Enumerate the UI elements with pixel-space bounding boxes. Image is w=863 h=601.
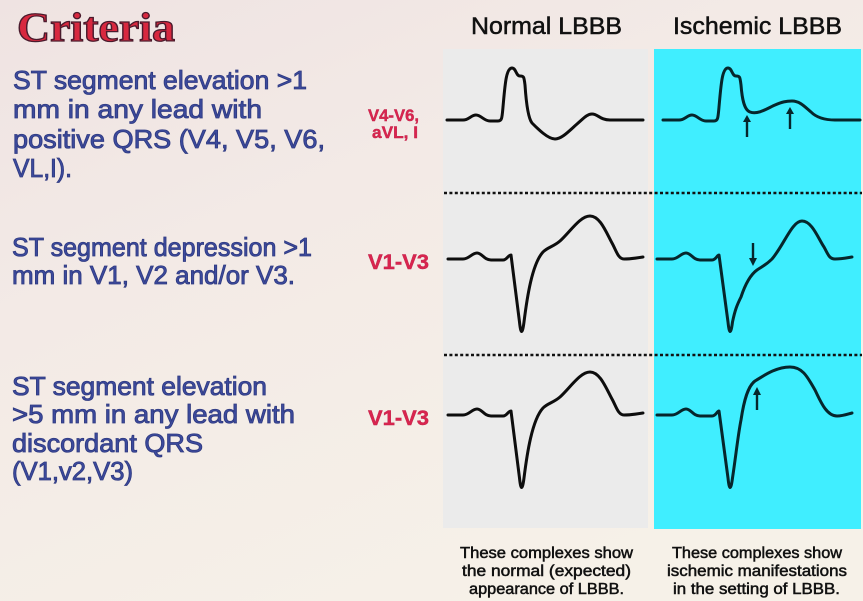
text block: criterion 2: ST segment depression >1 bbox=[12, 232, 312, 262]
ECG: ischemic V1-V3 row 2 bbox=[657, 221, 852, 332]
lead label: V1-V3 row 2: V1-V3 bbox=[368, 251, 429, 274]
panel: normal LBBB bbox=[443, 49, 648, 528]
text block: criterion 1: mm in any lead with bbox=[13, 94, 262, 124]
ECG: normal V1-V3 row 3 bbox=[448, 372, 643, 488]
lead label: V1-V3 row 3: V1-V3 bbox=[368, 407, 429, 430]
arrow: ST elevation discordant bbox=[753, 387, 761, 410]
caption: normal: These complexes show bbox=[460, 545, 634, 562]
ECG: ischemic V4-V6 bbox=[663, 68, 860, 121]
title: Criteria bbox=[17, 4, 175, 50]
text block: criterion 3: (V1,v2,V3) bbox=[12, 456, 133, 486]
text block: criterion 3 bbox=[12, 371, 295, 486]
text block: criterion 3: >5 mm in any lead with bbox=[12, 399, 295, 429]
ECG: normal V4-V6 bbox=[447, 68, 643, 139]
lead label: V4-V6, aVL, I: aVL, I bbox=[372, 123, 418, 142]
caption: ischemic: ischemic manifestations bbox=[667, 563, 847, 580]
caption: ischemic: These complexes show bbox=[672, 545, 843, 562]
text block: criterion 1: positive QRS (V4, V5, V6, bbox=[13, 124, 325, 154]
caption: ischemic: in the setting of LBBB. bbox=[673, 581, 840, 598]
text block: criterion 2: mm in V1, V2 and/or V3. bbox=[12, 260, 295, 290]
caption: normal: the normal (expected) bbox=[462, 563, 631, 580]
caption: ischemic bbox=[667, 545, 847, 598]
lead label: V4-V6, aVL, I bbox=[368, 106, 419, 142]
ECG: normal V1-V3 row 2 bbox=[448, 216, 643, 332]
arrow: T wave bbox=[786, 107, 794, 129]
text block: criterion 3: discordant QRS bbox=[12, 428, 203, 458]
arrow: ST depression bbox=[749, 243, 757, 266]
text block: criterion 3: ST segment elevation bbox=[12, 371, 267, 401]
text block: criterion 2 bbox=[12, 232, 312, 290]
text block: criterion 1 bbox=[13, 65, 325, 183]
caption: normal: appearance of LBBB. bbox=[469, 581, 624, 598]
ECG: ischemic V1-V3 row 3 bbox=[657, 367, 852, 488]
caption: normal bbox=[460, 545, 634, 598]
panel: ischemic LBBB bbox=[654, 49, 861, 529]
text block: criterion 1: VL,I). bbox=[13, 153, 72, 183]
heading: Normal LBBB: Normal LBBB bbox=[471, 13, 622, 40]
heading: Ischemic LBBB: Ischemic LBBB bbox=[673, 13, 842, 40]
text block: criterion 1: ST segment elevation >1 bbox=[13, 65, 307, 95]
arrow: ST elevation bbox=[743, 115, 751, 137]
lead label: V4-V6, aVL, I: V4-V6, bbox=[368, 106, 419, 125]
